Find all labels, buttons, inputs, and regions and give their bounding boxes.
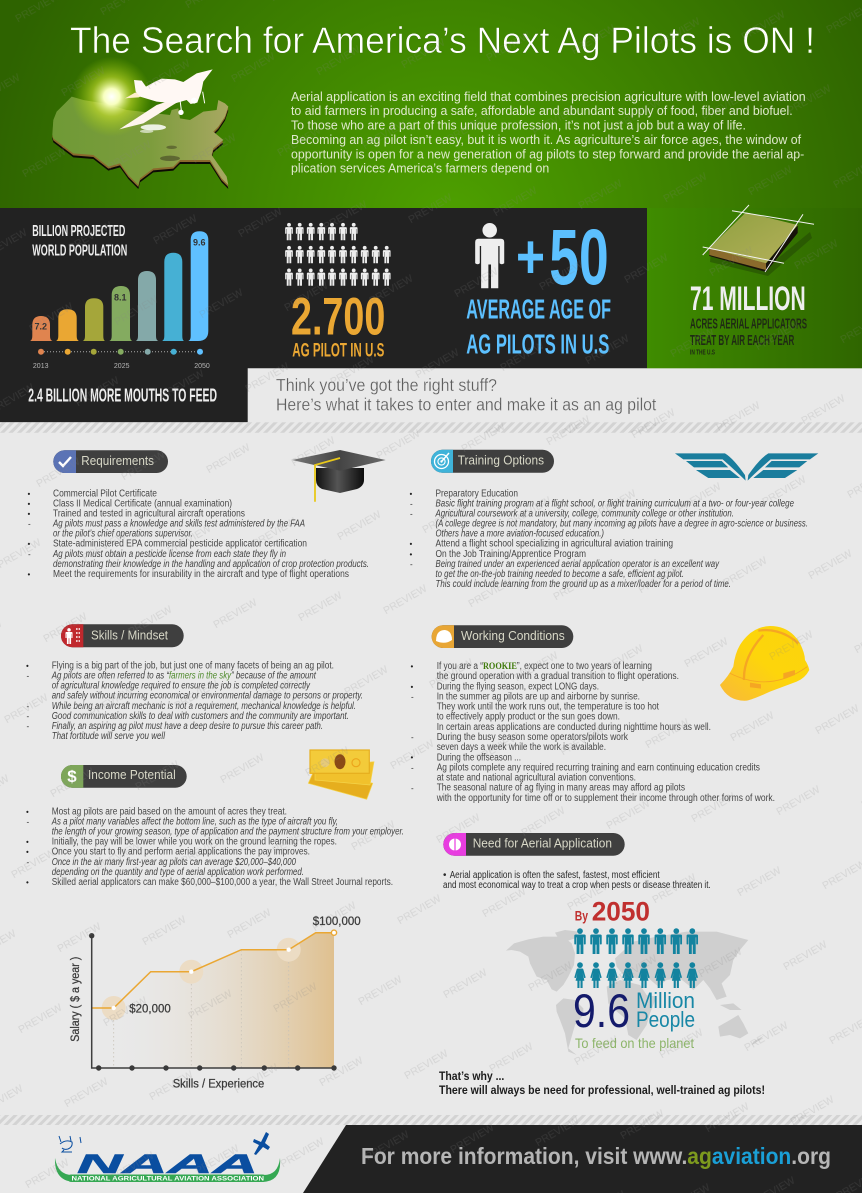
chart labels: $20,000 [129, 1004, 171, 1016]
heading pill: Training Options [458, 454, 544, 468]
stat: 9.6 million people [573, 984, 695, 1051]
text block: • [443, 870, 447, 881]
header panel [0, 0, 862, 208]
intro text: to aid farmers in producing a safe, affordable and abundant supply of food, fiber and biofuel. [291, 104, 793, 118]
stat: 9.6 million people: 9.6 [573, 984, 630, 1037]
list: During the flying season, expect LONG days. [437, 681, 599, 692]
stat: average age: AG PILOTS IN U.S [466, 328, 609, 359]
list: - [411, 692, 414, 702]
timeline: 2025 [114, 363, 130, 370]
heading: world population: WORLD POPULATION [32, 242, 127, 259]
caption: acres: IN THE U.S [690, 349, 715, 356]
section: skills / mindset [26, 624, 363, 742]
list: State-administered EPA commercial pesticide applicator certification [53, 538, 307, 550]
footer logo: NAAA [55, 1132, 280, 1182]
heading pill: Requirements [81, 454, 154, 468]
logo wordmark: NAAA [77, 1149, 258, 1179]
list: Most ag pilots are paid based on the amount of acres they treat. [52, 806, 287, 818]
list: Ag pilots complete any required recurring training and earn continuing education credits [437, 762, 760, 773]
bar chart: world population [30, 231, 210, 370]
list: • [28, 490, 30, 498]
bar chart: world population: 9.6 [193, 237, 206, 247]
list: • [410, 550, 412, 559]
list: depending on the quantity and type of aerial application work performed. [52, 867, 304, 878]
heading pill: Need for Aerial Application [473, 837, 612, 851]
list: If you are a “ROOKIE”, expect one to two years of learning [437, 661, 652, 672]
list: • [28, 500, 30, 508]
list [410, 488, 808, 590]
section: training options [410, 450, 818, 590]
heading: by 2050: By [575, 908, 588, 924]
subheading [276, 375, 656, 414]
timeline: 2050 [194, 363, 210, 370]
intro text: Becoming an ag pilot isn’t easy, but it is worth it. As agriculture’s air force ages, the window of [291, 133, 802, 147]
list: Good communication skills to deal with customers and the community are important. [52, 711, 349, 722]
list: - [26, 818, 30, 826]
text block: Aerial application is often the safest, fastest, most efficient [450, 870, 660, 881]
list: Commercial Pilot Certificate [53, 488, 157, 500]
timeline: 2013 [33, 363, 49, 370]
list: - [411, 733, 414, 742]
list: • [28, 570, 30, 579]
bar chart: world population: 7.2 [34, 322, 47, 332]
list: Agricultural coursework at a university, college, community college or other institution. [435, 508, 734, 520]
stat: 9.6 million people: Million [636, 988, 695, 1013]
list: The seasonal nature of ag flying in many areas may afford ag pilots [437, 783, 685, 794]
list: - [26, 858, 30, 867]
icon: wings [675, 453, 818, 481]
icon: pilot figure [475, 223, 504, 288]
list [26, 660, 363, 742]
list: • [410, 490, 412, 498]
list [410, 661, 775, 804]
callout: mouths to feed: 2.4 BILLION MORE MOUTHS TO FEED [28, 386, 217, 406]
list: • [28, 510, 30, 518]
stripe band [0, 422, 862, 433]
icon: crop duster [253, 1132, 270, 1155]
conclusion [439, 1069, 765, 1097]
list: of agricultural knowledge required to ensure the job is completed correctly [52, 681, 311, 692]
pictogram: pilots [285, 223, 391, 286]
chart labels: Skills / Experience [173, 1079, 264, 1091]
section: income potential [26, 750, 404, 888]
heading pill [432, 625, 573, 648]
list: While being an aircraft mechanic is not a requirement, mechanical knowledge is helpful. [52, 701, 356, 712]
intro text: plication services America’s farmers depend on [291, 162, 549, 176]
title: The Search for America’s Next Ag Pilots is ON ! [70, 20, 815, 61]
chart labels [70, 916, 361, 1091]
conclusion: There will always be need for professional, well-trained ag pilots! [439, 1083, 765, 1097]
text block: and most economical way to treat a crop when pests or disease threaten it. [443, 880, 711, 891]
line chart: salary vs experience [70, 916, 361, 1091]
section: need for aerial application [439, 833, 765, 1097]
list: As a pilot many variables affect the bottom line, such as the type of aircraft you fly, [51, 816, 338, 828]
list [26, 806, 404, 888]
list: seven days a week while the work is available. [437, 742, 606, 753]
bar chart: world population: 8.1 [114, 293, 127, 303]
conclusion: That’s why ... [439, 1069, 504, 1083]
list: to get the on-the-job training needed to become a safe, efficient ag pilot. [436, 569, 684, 580]
heading pill [431, 450, 554, 473]
list: Finally, an aspiring ag pilot must have a deep desire to pursue this career path. [52, 721, 323, 732]
list: Ag pilots are often referred to as “farmers in the sky” because of the amount [51, 670, 317, 682]
heading pill [61, 624, 184, 647]
list: - [410, 560, 413, 569]
list: demonstrating their knowledge in the handling and application of crop protection products. [53, 559, 369, 570]
list: - [411, 764, 414, 772]
stat: 9.6 million people: People [636, 1007, 695, 1032]
pictogram: people [574, 928, 698, 988]
list: Once in the air many first-year ag pilots can average $20,000–$40,000 [52, 857, 296, 868]
list: During the offseason ... [437, 752, 521, 763]
heading: world population [32, 223, 127, 259]
text block [443, 870, 711, 891]
panel: acres treated [647, 205, 862, 368]
list: • [410, 662, 414, 671]
intro text: To those who are a part of this unique profession, it’s not just a job but a way of life. [291, 118, 746, 132]
heading: by 2050: 2050 [592, 897, 650, 927]
list: That fortitude will serve you well [52, 731, 166, 742]
list: • [410, 540, 412, 548]
list: Class II Medical Certificate (annual examination) [53, 498, 232, 510]
list: Skilled aerial applicators can make $60,000–$100,000 a year, the Wall Street Journal reports. [52, 877, 393, 888]
list: They work until the work runs out, the temperature is too hot [437, 702, 659, 712]
footer link text: For more information, visit www.agaviation.org [361, 1143, 831, 1169]
list: Preparatory Education [436, 488, 518, 500]
stat: 2.700 pilots: 2.700 [291, 287, 385, 346]
chart labels: Salary ( $ a year ) [70, 957, 82, 1042]
stat: 2.700 pilots: AG PILOT IN U.S [292, 341, 384, 362]
list: - [410, 500, 413, 508]
icon: US map with plane [52, 57, 228, 189]
footer banner [303, 1125, 862, 1193]
stat: 9.6 million people: To feed on the planet [575, 1035, 694, 1051]
list: the length of your growing season, type of application and the payment structure from your employer. [52, 827, 404, 838]
list: - [28, 550, 31, 559]
list: - [411, 784, 414, 793]
list: • [410, 753, 414, 762]
list: with the opportunity for time off or to supplement their income through other forms of work. [436, 793, 775, 804]
heading pill [61, 765, 187, 788]
list: - [26, 712, 30, 721]
list: This could include learning from the ground up as a mixer/loader for a period of time. [436, 579, 731, 590]
list: the ground operation with a gradual transition to flight operations. [437, 671, 679, 682]
list: • [410, 682, 414, 691]
list: Trained and tested in agricultural aircraft operations [53, 508, 245, 520]
stripe band [0, 1115, 862, 1125]
section: working conditions [410, 625, 809, 804]
heading pill: $ [67, 767, 77, 786]
list: - [410, 510, 413, 518]
stat: average age [466, 212, 611, 359]
list: • [26, 878, 29, 887]
stat: average age: 50 [549, 212, 609, 301]
stat: average age: + [516, 223, 545, 292]
list: - [26, 702, 30, 711]
list: - [28, 520, 31, 528]
list: Attend a flight school specializing in agricultural aviation training [436, 538, 673, 550]
dark statistics band [0, 208, 647, 422]
logo swoosh [55, 1158, 280, 1182]
intro text: Aerial application is an exciting field that combines precision agriculture with low-level aviation [291, 90, 806, 104]
list: at state and national agricultural aviation conventions. [437, 772, 636, 784]
heading pill [443, 833, 625, 856]
icon: graduation cap [292, 450, 386, 502]
list: • [26, 808, 29, 816]
list: During the busy season some operators/pilots work [437, 732, 628, 743]
list: In the summer ag pilots are up and airborne by sunrise. [437, 691, 640, 702]
list: or the pilot’s chief operations supervisor. [53, 528, 193, 540]
subheading: Here’s what it takes to enter and make it as an ag pilot [276, 394, 656, 414]
heading pill: Skills / Mindset [91, 628, 168, 642]
heading: world population: BILLION PROJECTED [32, 223, 125, 240]
list: Flying is a big part of the job, but just one of many facets of being an ag pilot. [52, 660, 334, 672]
list: - [26, 722, 30, 731]
caption: acres [690, 315, 807, 356]
list: Others have a more aviation-focused education.) [436, 528, 604, 540]
list: • [26, 662, 29, 670]
icon: helicopter [59, 1136, 81, 1152]
list: • [28, 540, 30, 548]
section: requirements [28, 450, 386, 580]
list: Meet the requirements for insurability in the aircraft and type of flight operations [53, 569, 349, 580]
intro text [291, 90, 806, 176]
logo tagline: NATIONAL AGRICULTURAL AVIATION ASSOCIATION [72, 1176, 264, 1182]
list: Ag pilots must obtain a pesticide license from each state they fly in [52, 549, 286, 560]
subheading: Think you’ve got the right stuff? [276, 375, 497, 395]
list: Being trained under an experienced aerial application operator is an excellent way [436, 559, 720, 570]
list: On the Job Training/Apprentice Program [436, 549, 586, 560]
timeline [33, 349, 210, 370]
chart labels: $100,000 [313, 916, 361, 928]
list: • [26, 838, 29, 847]
heading pill [53, 450, 168, 473]
list: Once you start to fly and perform aerial applications the pay improves. [52, 847, 310, 858]
stat: average age: AVERAGE AGE OF [466, 293, 611, 324]
heading pill: Income Potential [88, 768, 176, 782]
list: to effectively apply product or the sun goes down. [437, 712, 620, 723]
icon: money [308, 750, 374, 799]
list [28, 488, 369, 580]
icon: field plot [703, 205, 814, 276]
list: • [26, 848, 29, 857]
list: In certain areas applications are conducted during nighttime hours as well. [437, 722, 711, 733]
list: Ag pilots must pass a knowledge and skills test administered by the FAA [52, 518, 305, 530]
heading pill: Working Conditions [461, 629, 565, 643]
list: - [26, 672, 30, 680]
list: and safely without incurring economical or environmental damage to persons or property. [52, 691, 363, 702]
list: Initially, the pay will be lower while you work on the ground learning the ropes. [52, 837, 337, 848]
stat: 2.700 pilots [291, 287, 385, 362]
intro text: opportunity is open for a new generation of ag pilots to step forward and provide the aerial ap- [291, 147, 804, 161]
world map [506, 930, 763, 1055]
icon: hard hat [720, 626, 809, 701]
